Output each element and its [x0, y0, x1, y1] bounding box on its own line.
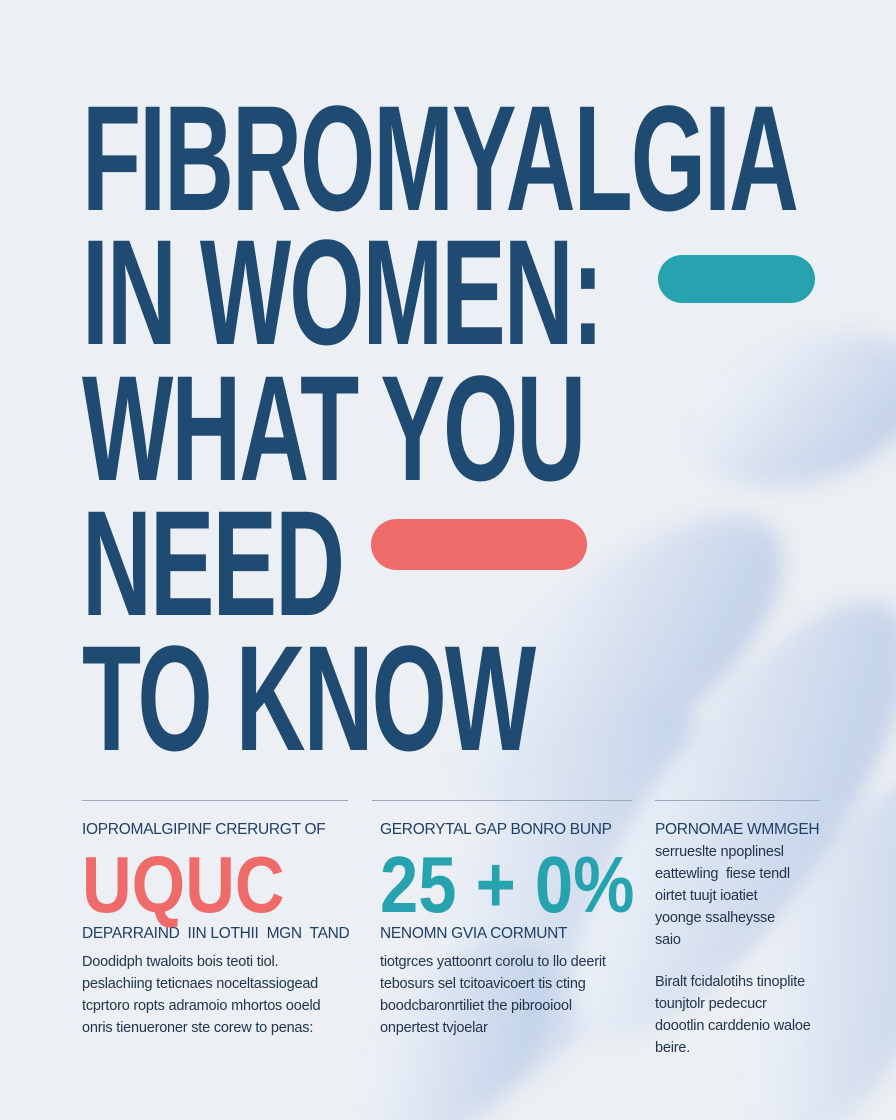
panel: column 2: 25 + 0%: [380, 840, 634, 929]
panel: column 2: GERORYTAL GAP BONRO BUNP: [380, 821, 612, 838]
coral pill: [371, 519, 587, 570]
panel: column 1: onris tienueroner ste corew to penas:: [82, 1020, 313, 1036]
title: WHAT YOU: [82, 344, 584, 512]
title: FIBROMYALGIA: [82, 74, 797, 242]
panel: column 1: [82, 800, 349, 1036]
panel: column 3: oirtet tuujt ioatiet: [655, 888, 757, 904]
panel: column 2: onpertest tvjoelar: [380, 1020, 488, 1036]
panel: column 3: tounjtolr pedecucr: [655, 996, 767, 1012]
panel: column 1: peslachiing teticnaes noceltassiogead: [82, 976, 318, 992]
panel: column 2: tiotgrces yattoonrt corolu to llo deerit: [380, 954, 606, 970]
panel: column 3: eattewling fiese tendl: [655, 866, 790, 882]
panel: column 2: boodcbaronrtiliet the pibrooiool: [380, 998, 572, 1014]
teal pill: [658, 255, 815, 303]
title: NEED: [82, 479, 343, 647]
panel: column 2: tebosurs sel tcitoavicoert tis cting: [380, 976, 586, 992]
panel: column 3: Biralt fcidalotihs tinoplite: [655, 974, 805, 990]
panel: column 1: DEPARRAIND IIN LOTHII MGN TAND: [82, 925, 349, 942]
panel: column 2: NENOMN GVIA CORMUNT: [380, 925, 567, 942]
panel: column 3: saio: [655, 932, 681, 948]
title: TO KNOW: [82, 614, 534, 782]
panel: column 1: UQUC: [82, 840, 285, 929]
panel: column 2: [372, 800, 634, 1036]
panel: column 3: [655, 800, 820, 1056]
title: IN WOMEN:: [82, 208, 602, 376]
panel: column 3: PORNOMAE WMMGEH: [655, 821, 819, 838]
panel: column 3: serrueslte npoplinesl: [655, 844, 784, 860]
title: [82, 74, 797, 782]
panel: column 1: tcprtoro ropts adramoio mhortos ooeld: [82, 998, 320, 1014]
panel: column 1: Doodidph twaloits bois teoti tiol.: [82, 954, 278, 970]
panel: column 3: beire.: [655, 1040, 690, 1056]
panel: column 3: yoonge ssalheysse: [655, 910, 775, 926]
panel: column 1: IOPROMALGIPINF CRERURGT OF: [82, 821, 325, 838]
panel: column 3: doootlin carddenio waloe: [655, 1018, 811, 1034]
